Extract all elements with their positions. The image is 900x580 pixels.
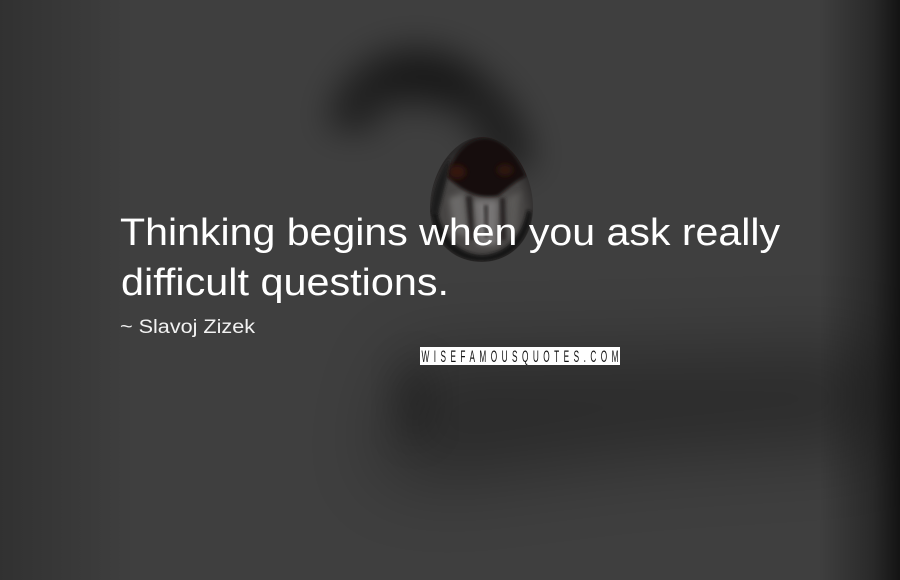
quote line 2: difficult questions. xyxy=(121,262,449,304)
quote text xyxy=(120,212,780,304)
quote line 1: Thinking begins when you ask really xyxy=(120,212,780,254)
water drop xyxy=(430,137,533,262)
author attribution: ~ Slavoj Zizek xyxy=(120,317,256,338)
watermark badge: WISEFAMOUSQUOTES.COM xyxy=(422,347,618,366)
blurred stem above the drop xyxy=(352,66,510,170)
